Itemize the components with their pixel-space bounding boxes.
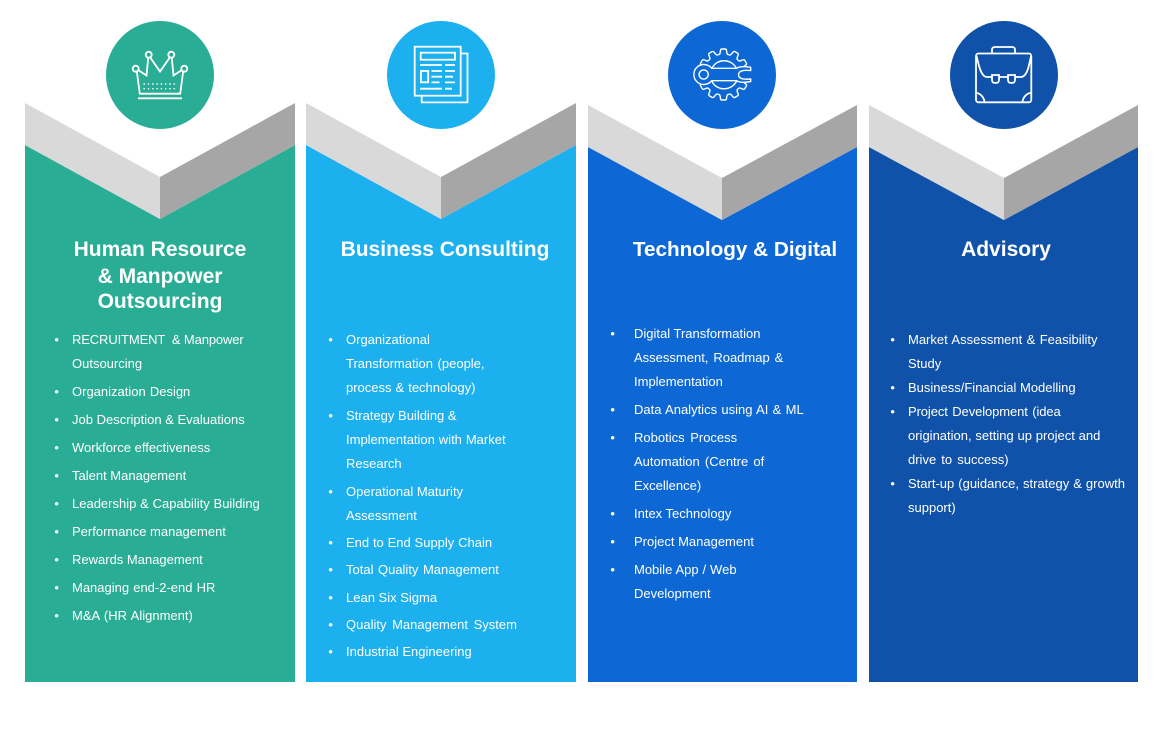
heading: advisory: Advisory	[961, 238, 1051, 261]
list: business consulting services: •	[328, 617, 333, 632]
list: technology services: Data Analytics using AI & ML	[634, 402, 804, 417]
list: business consulting services: Organizational	[346, 332, 430, 347]
list: advisory services: Project Development (idea	[908, 404, 1061, 419]
list: technology services: Assessment, Roadmap &	[634, 350, 783, 365]
list: human resource services: M&A (HR Alignment)	[72, 608, 193, 623]
list: human resource services: •	[54, 524, 59, 539]
list: human resource services: Managing end-2-end HR	[72, 580, 215, 595]
heading: business consulting: Business Consulting	[341, 238, 549, 261]
list: human resource services: •	[54, 332, 59, 347]
list: business consulting services: Total Quality Management	[346, 562, 499, 577]
list: technology services: Implementation	[634, 374, 723, 389]
list: technology services: •	[610, 562, 615, 577]
list: human resource services: Job Description & Evaluations	[72, 412, 245, 427]
list: business consulting services: •	[328, 644, 333, 659]
list: advisory services	[890, 332, 1125, 515]
list: business consulting services: End to End Supply Chain	[346, 535, 492, 550]
list: human resource services: Workforce effectiveness	[72, 440, 210, 455]
heading: human resource: Human Resource	[74, 238, 246, 261]
list: business consulting services: •	[328, 484, 333, 499]
heading: human resource: & Manpower	[98, 265, 222, 288]
icon: crown	[106, 21, 214, 129]
list: advisory services: Business/Financial Modelling	[908, 380, 1076, 395]
list: human resource services: •	[54, 384, 59, 399]
list: advisory services: •	[890, 404, 895, 419]
list: business consulting services: Operational Maturity	[346, 484, 463, 499]
list: human resource services: •	[54, 496, 59, 511]
list: technology services: •	[610, 326, 615, 341]
list: human resource services: •	[54, 608, 59, 623]
list: business consulting services: Assessment	[346, 508, 417, 523]
list: technology services: Project Management	[634, 534, 754, 549]
list: human resource services: •	[54, 412, 59, 427]
list: advisory services: •	[890, 380, 895, 395]
panel: advisory	[869, 105, 1138, 682]
list: business consulting services: Lean Six Sigma	[346, 590, 437, 605]
list: business consulting services: Quality Management System	[346, 617, 517, 632]
panel: technology and digital	[588, 105, 857, 682]
list: technology services: •	[610, 402, 615, 417]
list: human resource services: Rewards Management	[72, 552, 203, 567]
list: human resource services: •	[54, 440, 59, 455]
list: advisory services: •	[890, 332, 895, 347]
panel: business consulting	[306, 103, 576, 682]
list: human resource services	[54, 332, 260, 623]
list: business consulting services: Industrial Engineering	[346, 644, 472, 659]
list: technology services: Mobile App / Web	[634, 562, 737, 577]
list: business consulting services: process & technology)	[346, 380, 475, 395]
list: business consulting services: •	[328, 562, 333, 577]
list: advisory services: origination, setting up project and	[908, 428, 1100, 443]
list: business consulting services	[328, 332, 517, 659]
list: technology services: •	[610, 430, 615, 445]
list: business consulting services: •	[328, 332, 333, 347]
list: human resource services: RECRUITMENT & Manpower	[72, 332, 244, 347]
list: business consulting services: •	[328, 535, 333, 550]
list: business consulting services: •	[328, 408, 333, 423]
list: technology services: Intex Technology	[634, 506, 731, 521]
list: technology services: Excellence)	[634, 478, 701, 493]
list: human resource services: Outsourcing	[72, 356, 142, 371]
list: advisory services: •	[890, 476, 895, 491]
list: technology services: Robotics Process	[634, 430, 737, 445]
list: advisory services: Market Assessment & Feasibility	[908, 332, 1098, 347]
list: business consulting services: Research	[346, 456, 402, 471]
list: technology services: •	[610, 534, 615, 549]
icon: gear and wrench	[668, 21, 776, 129]
list: technology services	[610, 326, 804, 601]
list: business consulting services: Strategy Building &	[346, 408, 457, 423]
panel: human resource	[25, 103, 295, 682]
heading: technology and digital: Technology & Digital	[633, 238, 837, 261]
list: business consulting services: Implementation with Market	[346, 432, 506, 447]
list: human resource services: •	[54, 580, 59, 595]
list: advisory services: Start-up (guidance, strategy & growth	[908, 476, 1125, 491]
list: human resource services: Performance management	[72, 524, 226, 539]
list: human resource services: Talent Management	[72, 468, 186, 483]
list: human resource services: Leadership & Capability Building	[72, 496, 260, 511]
list: business consulting services: •	[328, 590, 333, 605]
heading: human resource	[74, 238, 246, 313]
list: advisory services: drive to success)	[908, 452, 1009, 467]
list: human resource services: •	[54, 468, 59, 483]
icon: briefcase	[950, 21, 1058, 129]
heading: human resource: Outsourcing	[98, 290, 222, 313]
list: advisory services: support)	[908, 500, 956, 515]
icon: newspaper	[387, 21, 495, 129]
list: technology services: Automation (Centre of	[634, 454, 764, 469]
list: technology services: Digital Transformation	[634, 326, 760, 341]
list: technology services: Development	[634, 586, 711, 601]
list: business consulting services: Transformation (people,	[346, 356, 485, 371]
list: human resource services: Organization Design	[72, 384, 190, 399]
list: advisory services: Study	[908, 356, 941, 371]
list: technology services: •	[610, 506, 615, 521]
list: human resource services: •	[54, 552, 59, 567]
